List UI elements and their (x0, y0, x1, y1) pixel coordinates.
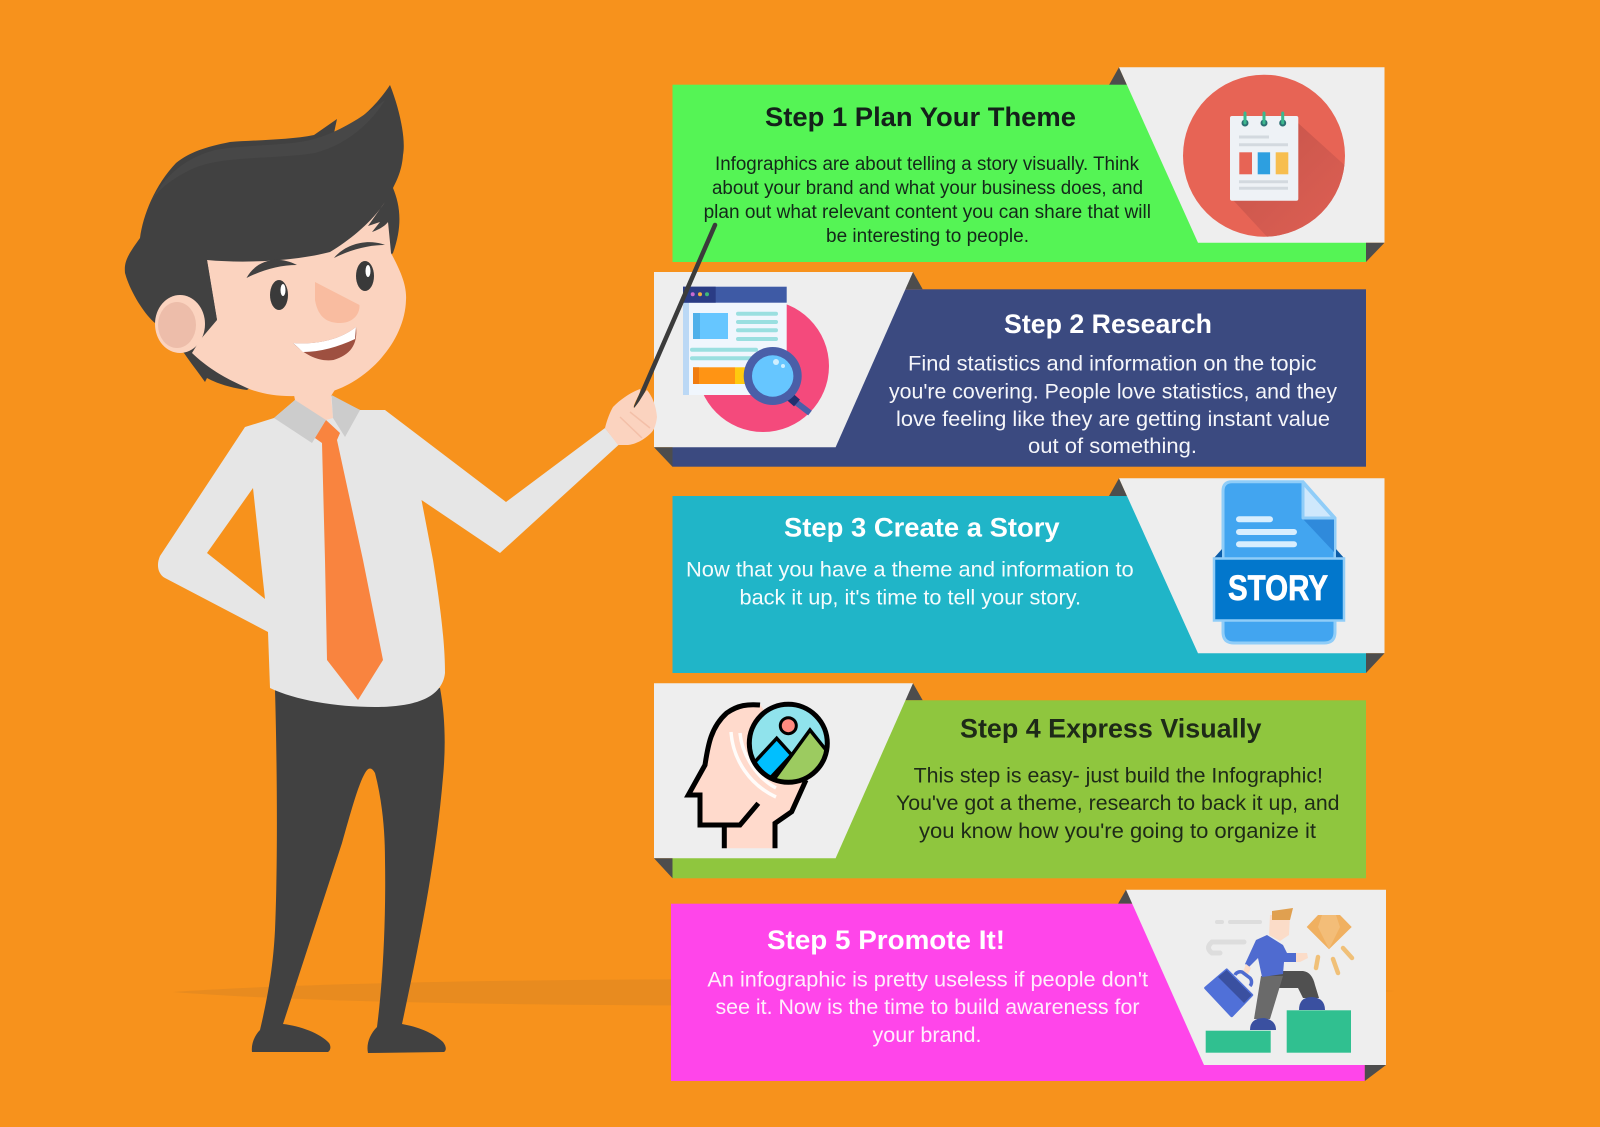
eyes (270, 280, 288, 310)
text: step 5 body: see it. Now is the time to build awareness for (716, 996, 1140, 1019)
text: step 2 body: love feeling like they are getting instant value (896, 408, 1330, 431)
trousers and shoes (252, 688, 446, 1053)
face (192, 202, 406, 396)
icon: web page with magnifier (683, 287, 829, 432)
heading: step 4: Step 4 Express Visually (960, 714, 1262, 744)
panel: step 2 (654, 272, 1366, 467)
text: step 2 body: you're covering. People love statistics, and they (889, 381, 1338, 404)
text: step 3 body: back it up, it's time to tell your story. (740, 587, 1081, 610)
text: step 2 body: out of something. (1028, 435, 1197, 458)
text: step 5 body: An infographic is pretty useless if people don't (707, 969, 1148, 992)
text: step 1 body: Infographics are about telling a story visually. Think (715, 154, 1139, 175)
text: step 4 body: You've got a theme, research to back it up, and (896, 792, 1340, 815)
pointer stick (636, 225, 715, 407)
label: STORY: STORY (1228, 569, 1328, 608)
mouth (293, 327, 356, 360)
heading: step 5: Step 5 Promote It! (767, 925, 1005, 955)
collar (274, 400, 326, 443)
illustration: presenter (125, 85, 715, 1053)
ear (155, 295, 205, 353)
shirt (158, 396, 618, 707)
text: step 5 body (707, 969, 1148, 1047)
necktie (314, 420, 383, 700)
heading: step 3: Step 3 Create a Story (784, 513, 1060, 543)
eyebrows (246, 260, 297, 278)
text: step 3 body (686, 559, 1134, 610)
icon: head with picture (688, 704, 830, 848)
text: step 1 body: be interesting to people. (826, 226, 1029, 247)
text: step 4 body: This step is easy- just build the Infographic! (914, 765, 1323, 788)
floor shadow (173, 979, 1395, 1005)
neck (292, 385, 338, 437)
text: step 1 body (704, 154, 1151, 247)
text: step 4 body: you know how you're going to organize it (919, 820, 1316, 843)
heading: step 1: Step 1 Plan Your Theme (765, 102, 1076, 132)
panel: step 3 (672, 478, 1384, 673)
text: step 1 body: about your brand and what your business does, and (712, 178, 1143, 199)
hair (125, 85, 404, 390)
panel: step 5 (671, 890, 1386, 1081)
hand (605, 389, 657, 445)
text: step 1 body: plan out what relevant content you can share that will (704, 202, 1151, 223)
text: step 2 body (889, 353, 1338, 458)
nose (315, 282, 360, 323)
icon: story document (1214, 482, 1344, 643)
icon: businessman climbing steps (1206, 908, 1352, 1053)
panel: step 4 (654, 683, 1366, 878)
text: step 5 body: your brand. (872, 1024, 982, 1047)
text: step 3 body: Now that you have a theme and information to (686, 559, 1134, 582)
panel: step 1 (672, 67, 1384, 262)
text: step 4 body (896, 765, 1340, 843)
icon: notepad with bars (1183, 75, 1350, 240)
text: step 2 body: Find statistics and information on the topic (908, 353, 1316, 376)
heading: step 2: Step 2 Research (1004, 309, 1212, 339)
